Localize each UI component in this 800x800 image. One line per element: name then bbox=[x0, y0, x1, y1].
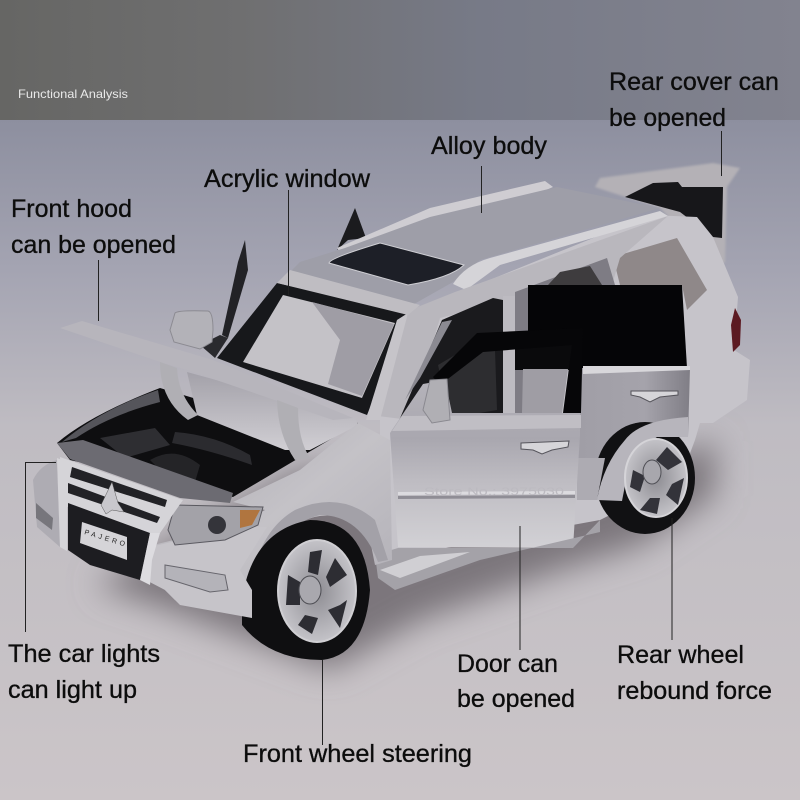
front fender bbox=[145, 423, 392, 618]
grille slats bottom bbox=[68, 483, 160, 523]
callout: car lights: can light up bbox=[8, 676, 137, 704]
open upper door tip right bbox=[337, 208, 366, 250]
chrome pillar left bbox=[57, 458, 67, 551]
number plate: PAJERO bbox=[83, 529, 126, 548]
callout: car lights: The car lights bbox=[8, 640, 160, 668]
front cowl strip bbox=[57, 440, 233, 503]
chrome pillar right bbox=[140, 533, 160, 585]
tail light bbox=[731, 308, 741, 352]
engine bay bbox=[57, 388, 358, 497]
door mirror bbox=[423, 379, 450, 423]
windscreen frame bbox=[217, 283, 408, 415]
airbox bbox=[100, 428, 170, 458]
header band bbox=[0, 0, 800, 120]
front door belt bbox=[392, 415, 581, 431]
hood strut right bbox=[277, 400, 310, 460]
door watermark: Store No.: 3975030 bbox=[424, 486, 564, 498]
engine cover bbox=[150, 454, 200, 482]
front wheel rim bbox=[278, 540, 356, 642]
ground shadow bbox=[95, 440, 715, 670]
rear door sill highlight bbox=[583, 366, 690, 374]
badge bbox=[101, 482, 124, 514]
callout: rear cover bbox=[609, 68, 779, 176]
rear door glass frame bbox=[528, 285, 687, 368]
roof bbox=[277, 187, 660, 312]
callout: rear wheel bbox=[617, 518, 772, 705]
callout: door: be opened bbox=[457, 685, 575, 713]
rear door panel bbox=[577, 368, 690, 500]
open hood plate bbox=[60, 321, 353, 420]
step highlight bbox=[380, 552, 470, 578]
callout: rear cover: Rear cover can bbox=[609, 68, 779, 96]
rear tyre bbox=[595, 422, 695, 534]
fender arch rim bbox=[250, 502, 388, 600]
interior seat bbox=[438, 345, 497, 418]
heading: functional analysis: Functional Analysis bbox=[18, 87, 128, 101]
front seat bbox=[312, 302, 394, 396]
callout: front hood bbox=[11, 195, 176, 321]
bay wall bbox=[62, 390, 160, 442]
callout: rear cover: be opened bbox=[609, 104, 726, 132]
door crease bbox=[398, 491, 575, 495]
side mirror bbox=[170, 311, 228, 358]
open upper door tip left bbox=[222, 240, 248, 338]
front door panel bbox=[390, 380, 580, 548]
lower grille bbox=[68, 503, 150, 580]
door glass pale edge bbox=[405, 320, 452, 400]
headlight bbox=[168, 505, 263, 545]
callout: acrylic window: Acrylic window bbox=[204, 165, 371, 193]
raised rear door bbox=[595, 163, 740, 263]
left bumper bbox=[33, 460, 60, 547]
A pillar and upper side bbox=[370, 216, 668, 420]
cowl top bbox=[277, 270, 420, 315]
callout: alloy body: Alloy body bbox=[431, 132, 547, 160]
grille slats top bbox=[70, 467, 167, 507]
door crease shadow bbox=[398, 495, 575, 499]
callout: alloy body bbox=[431, 132, 547, 213]
interior opening bbox=[395, 298, 503, 430]
rear cabin opening bbox=[515, 258, 615, 420]
callout: rear wheel: rebound force bbox=[617, 677, 772, 705]
rear wheel arch bbox=[597, 417, 688, 501]
inner door panel seen through frame bbox=[522, 369, 568, 413]
side roof rail bbox=[453, 211, 668, 290]
callout: front hood: Front hood bbox=[11, 195, 132, 223]
fog light bbox=[165, 565, 228, 592]
roof rail back bbox=[337, 181, 553, 258]
glass behind front door frame bbox=[515, 340, 572, 370]
B pillar bbox=[503, 296, 515, 418]
rear window bbox=[613, 238, 707, 310]
callout: front wheel: Front wheel steering bbox=[243, 740, 472, 768]
callout: front hood: can be opened bbox=[11, 231, 176, 259]
side step bbox=[375, 520, 600, 590]
rear door handle bbox=[631, 391, 678, 402]
callout: car lights bbox=[8, 462, 160, 704]
car model bbox=[33, 163, 750, 660]
rear wheel rim bbox=[625, 439, 687, 517]
callout: door bbox=[457, 526, 575, 713]
front bumper bbox=[142, 527, 267, 618]
rear body bbox=[380, 215, 750, 560]
windscreen glass bbox=[243, 295, 395, 398]
engine hose bbox=[172, 432, 252, 465]
hood underside bbox=[187, 372, 358, 450]
front door frame bbox=[433, 328, 583, 413]
left corner light bbox=[36, 503, 53, 530]
hood strut left bbox=[160, 362, 198, 420]
front door handle bbox=[521, 441, 569, 454]
callout: door: Door can bbox=[457, 650, 558, 678]
panel below rear door bbox=[577, 458, 605, 500]
sunroof bbox=[329, 243, 464, 285]
rear cabin seat bbox=[548, 266, 602, 285]
front tyre bbox=[242, 520, 370, 660]
A pillar highlight bbox=[366, 313, 408, 420]
grille chrome bbox=[60, 457, 183, 535]
callout: rear wheel: Rear wheel bbox=[617, 641, 744, 669]
number plate bbox=[80, 522, 127, 560]
